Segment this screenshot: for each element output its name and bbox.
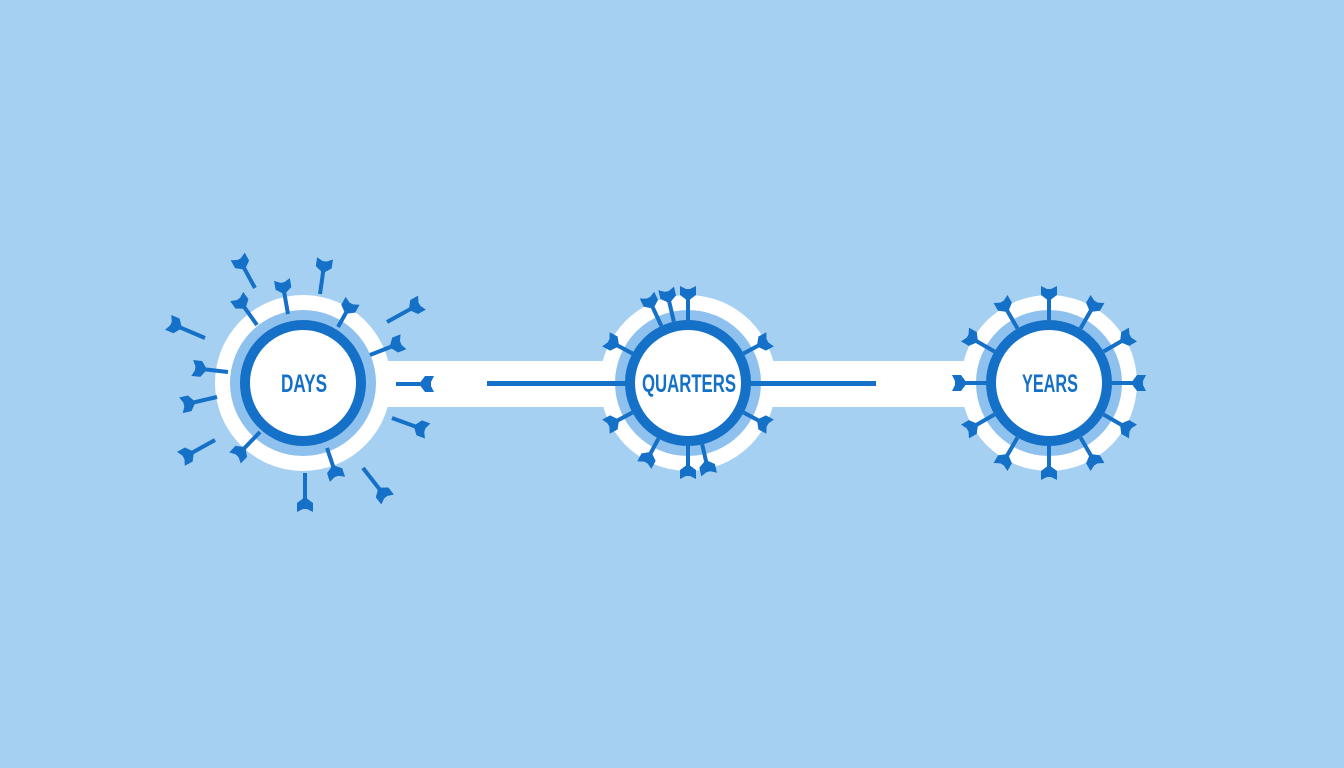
circle: years bbox=[952, 286, 1146, 480]
arrows: quarters bbox=[602, 286, 774, 479]
label: quarters: QUARTERS bbox=[642, 370, 736, 398]
arrows: days bbox=[165, 253, 434, 512]
arrows: years bbox=[952, 286, 1146, 480]
label: years: YEARS bbox=[1022, 370, 1078, 398]
connector band bbox=[370, 361, 990, 407]
circle: quarters bbox=[600, 286, 776, 479]
label: days: DAYS bbox=[281, 370, 327, 398]
circle: days bbox=[165, 253, 434, 512]
